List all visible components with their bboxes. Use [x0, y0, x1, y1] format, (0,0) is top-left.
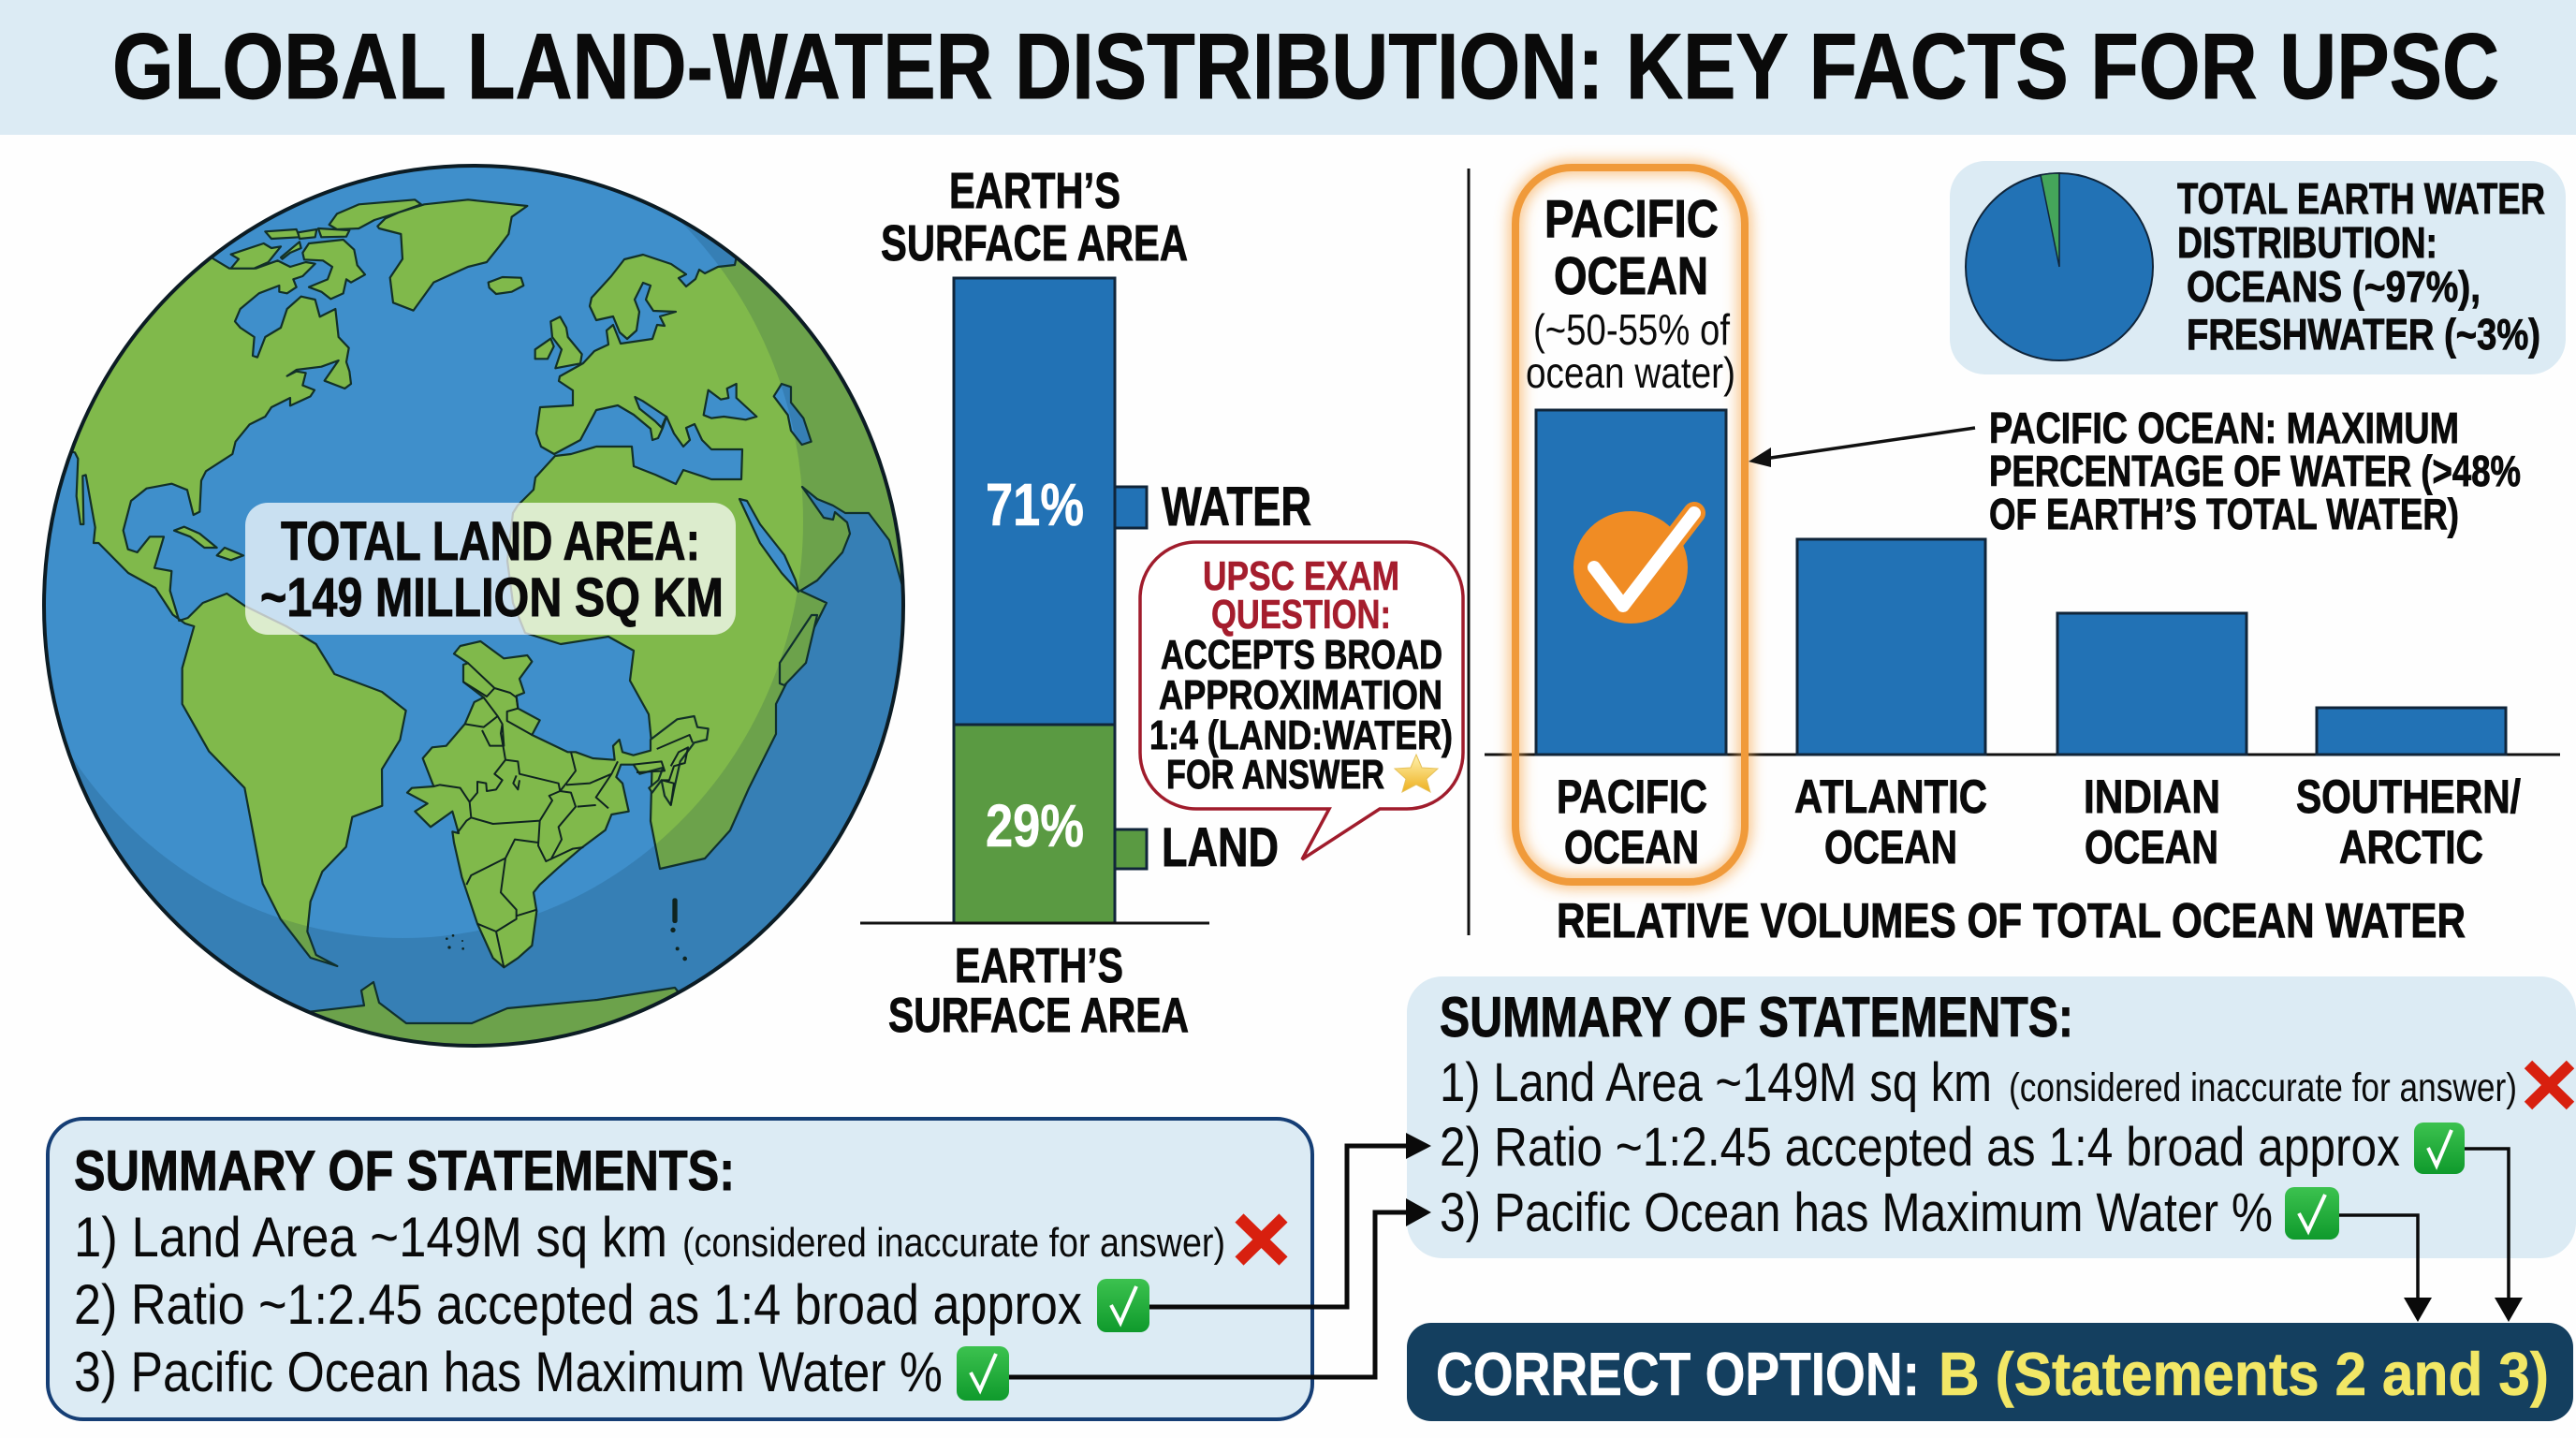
29 percent: 29%: [986, 792, 1084, 859]
Pacific heading: ocean water): [1526, 348, 1735, 397]
Pacific heading: (~50-55% of: [1533, 305, 1730, 354]
Pacific callout text: PACIFIC OCEAN: MAXIMUM: [1989, 404, 2459, 452]
icon: green check: [2414, 1123, 2465, 1174]
Red Sea: [739, 499, 798, 592]
chart axis label: EARTH’S: [955, 939, 1123, 993]
71 percent: 71%: [986, 471, 1084, 538]
pie chart: [1966, 173, 2153, 360]
statement 3: 3) Pacific Ocean has Maximum Water %: [1440, 1182, 2273, 1243]
statement 2: 2) Ratio ~1:2.45 accepted as 1:4 broad approx: [74, 1273, 1082, 1336]
panel: summary of statements (left): [48, 1119, 1312, 1419]
callout: UPSC exam question: UPSC EXAM: [1203, 553, 1399, 599]
correct option banner: CORRECT OPTION:: [1436, 1340, 1920, 1408]
globe outline: [44, 166, 903, 1046]
pie legend text: OCEANS (~97%),: [2187, 262, 2481, 311]
callout: UPSC exam question: [1140, 542, 1463, 859]
Eurasia and Africa: [506, 253, 900, 871]
bar labels: ATLANTIC: [1794, 770, 1987, 823]
land segment: [954, 725, 1115, 923]
Pacific heading: PACIFIC: [1544, 189, 1719, 249]
bar labels: PACIFIC: [1557, 770, 1707, 823]
callout: UPSC exam question: ACCEPTS BROAD: [1161, 632, 1442, 678]
axis: [1485, 753, 2560, 756]
connector arrow: statement 2 across panels: [1149, 1133, 1431, 1307]
icon: green check: [1097, 1279, 1149, 1332]
bar: Indian: [2057, 613, 2247, 755]
callout: UPSC exam question: QUESTION:: [1211, 592, 1391, 638]
Pacific highlight frame: [1515, 168, 1745, 882]
land legend: LAND: [1162, 817, 1279, 878]
bar: Southern/Arctic: [2317, 708, 2506, 755]
total land area label: ~149 MILLION SQ KM: [260, 567, 724, 628]
Antarctica: [311, 981, 679, 1044]
statement 1: [74, 1206, 1225, 1269]
Americas and arctic: [73, 198, 528, 968]
statement 1: 1) Land Area ~149M sq km: [1440, 1052, 1992, 1113]
statement 2: 2) Ratio ~1:2.45 accepted as 1:4 broad approx: [1440, 1117, 2400, 1178]
summary heading: SUMMARY OF STATEMENTS:: [74, 1139, 735, 1202]
pie legend text: DISTRIBUTION:: [2177, 218, 2437, 267]
callout: UPSC exam question: FOR ANSWER: [1166, 752, 1384, 798]
Pacific callout text: [1989, 404, 2521, 538]
chart axis label: [888, 939, 1189, 1043]
summary heading: SUMMARY OF STATEMENTS:: [1440, 986, 2073, 1049]
water legend: WATER: [1162, 477, 1311, 537]
icon: green check: [2285, 1187, 2339, 1240]
Andaman and Lakshadweep islands: [446, 898, 687, 961]
India map with state borders: [407, 641, 709, 967]
ocean volume bar chart: [1485, 168, 2560, 948]
icon: green check: [957, 1346, 1009, 1401]
bar labels: SOUTHERN/: [2296, 770, 2521, 823]
continents: [73, 198, 901, 1044]
icon: red cross: [2528, 1064, 2570, 1106]
total land area label: [245, 503, 736, 635]
shaded terminator: [73, 223, 901, 1044]
chart heading: EARTH’S: [949, 163, 1120, 219]
icon: orange check badge: [1573, 511, 1694, 624]
inland seas: [489, 277, 812, 445]
bar labels: OCEAN: [1564, 821, 1699, 873]
statement 1: [1440, 1052, 2517, 1113]
chart heading: SURFACE AREA: [881, 215, 1188, 271]
chart axis label: SURFACE AREA: [888, 989, 1189, 1043]
Madagascar: [780, 615, 817, 685]
globe illustration: [42, 164, 905, 1048]
bar labels: OCEAN: [2085, 821, 2218, 873]
icon: star: [1395, 755, 1438, 792]
connector arrow: statement 3 across panels: [1009, 1198, 1431, 1377]
statement 1: 1) Land Area ~149M sq km: [74, 1206, 667, 1269]
statement 1: (considered inaccurate for answer): [682, 1220, 1225, 1266]
callout: UPSC exam question: APPROXIMATION: [1159, 672, 1442, 718]
arrow to Pacific bar: [1749, 428, 1975, 467]
land legend: [1115, 817, 1279, 878]
panel: summary of statements (right): [1407, 976, 2576, 1258]
bar labels: [1557, 770, 2521, 873]
bar labels: INDIAN: [2084, 770, 2220, 823]
globe ocean: [44, 166, 903, 1046]
statement 3: 3) Pacific Ocean has Maximum Water %: [74, 1341, 943, 1403]
Pacific heading: OCEAN: [1554, 246, 1708, 306]
connector arrow: statement 3 to answer: [2339, 1215, 2432, 1322]
water legend: [1115, 477, 1311, 537]
Pacific callout text: OF EARTH’S TOTAL WATER): [1989, 490, 2459, 538]
Greenland: [377, 199, 527, 311]
bar: Atlantic: [1797, 539, 1985, 755]
Pacific heading: [1526, 189, 1735, 397]
title banner: [0, 0, 2576, 135]
bar labels: OCEAN: [1824, 821, 1957, 873]
icon: red cross: [1239, 1218, 1283, 1261]
chart heading: [881, 163, 1188, 271]
connector arrow: statement 2 to answer: [2465, 1149, 2523, 1322]
correct option banner: [1407, 1323, 2573, 1421]
total land area label: TOTAL LAND AREA:: [281, 511, 700, 572]
bar labels: ARCTIC: [2339, 821, 2483, 873]
surface area stacked bar chart: [860, 163, 1311, 1043]
water segment: [954, 278, 1115, 725]
callout: UPSC exam question: 1:4 (LAND:WATER): [1149, 712, 1453, 758]
panel: total earth water distribution: [1950, 161, 2566, 374]
correct option banner: B (Statements 2 and 3): [1939, 1340, 2549, 1408]
pie legend text: [2177, 174, 2545, 359]
bar: Pacific: [1536, 410, 1726, 755]
